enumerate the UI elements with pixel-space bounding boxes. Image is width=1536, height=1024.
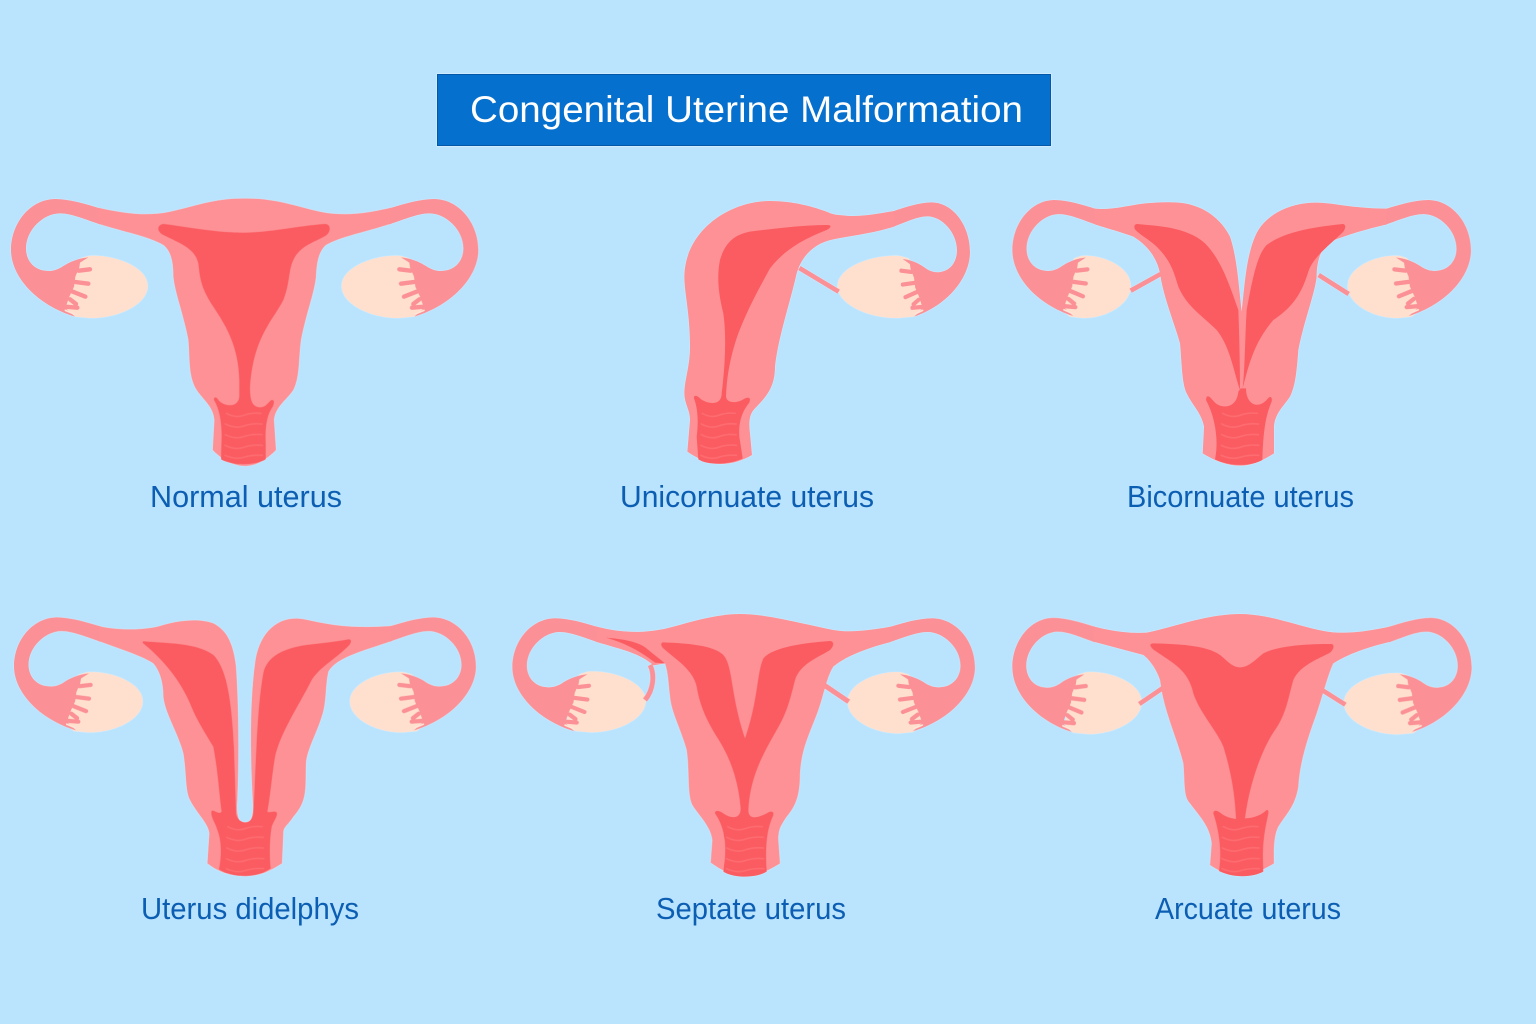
right fallopian tube (390, 617, 476, 730)
panel: bicornuate uterus (1012, 200, 1471, 514)
left ovary (1065, 672, 1142, 734)
panel: unicornuate uterus (620, 201, 970, 514)
uterus body (597, 614, 891, 876)
left uterine cavity (1134, 224, 1240, 390)
right fallopian tube (1385, 200, 1471, 316)
cervix (1206, 388, 1272, 465)
left fallopian tube (14, 617, 100, 730)
uterine cavities and cervix (143, 639, 351, 876)
label: uterus didelphys: Uterus didelphys (141, 891, 359, 926)
uterus body (98, 198, 391, 466)
right ovary (342, 256, 423, 318)
cervical folds (226, 826, 264, 872)
uterine cavity and cervix (158, 224, 330, 464)
cervical folds (726, 826, 764, 872)
right ovary (350, 672, 424, 732)
left ovary (1063, 256, 1131, 318)
right fallopian tube (389, 199, 478, 317)
left ovary (567, 671, 646, 732)
right uterine cavity (1243, 224, 1345, 388)
title banner: Congenital Uterine Malformation (470, 89, 1023, 130)
left fallopian tube (11, 199, 100, 317)
cervical folds (1221, 413, 1259, 458)
label: arcuate uterus: Arcuate uterus (1155, 891, 1341, 926)
right ovary (1344, 673, 1421, 734)
uterine cavity and cervix (694, 225, 831, 464)
left fallopian tube (1012, 618, 1095, 732)
panel: normal uterus (11, 198, 478, 514)
cervical folds (225, 413, 262, 458)
panel: arcuate uterus (1012, 614, 1472, 926)
left fallopian tube (1012, 200, 1097, 316)
label: normal uterus: Normal uterus (150, 479, 342, 514)
uterine cavity and cervix (1150, 643, 1333, 876)
cervical folds (1222, 826, 1259, 872)
uterine cavity with septum and cervix (661, 641, 833, 877)
left ovary (67, 256, 148, 318)
panel: uterus didelphys (14, 617, 476, 926)
title banner (436, 74, 1052, 146)
right ovary (848, 672, 921, 733)
label: bicornuate uterus: Bicornuate uterus (1127, 479, 1354, 514)
label: septate uterus: Septate uterus (656, 891, 846, 926)
left ovary (66, 672, 143, 732)
panel: septate uterus (512, 614, 975, 926)
ligament (799, 268, 839, 292)
obstructed horn (606, 638, 665, 663)
ligaments (645, 665, 849, 702)
uterus body (98, 618, 392, 876)
uterus body (1095, 202, 1387, 466)
uterus body (684, 201, 895, 464)
cervical folds (701, 413, 736, 458)
label: unicornuate uterus: Unicornuate uterus (620, 479, 874, 514)
right ovary (1348, 256, 1419, 318)
ovary (838, 256, 923, 318)
ligaments (1139, 688, 1345, 705)
left fallopian tube (512, 618, 599, 731)
ligaments (1131, 274, 1349, 294)
fallopian tube (893, 202, 970, 317)
right fallopian tube (889, 618, 975, 731)
right fallopian tube (1389, 618, 1472, 732)
uterus body (1093, 614, 1391, 876)
